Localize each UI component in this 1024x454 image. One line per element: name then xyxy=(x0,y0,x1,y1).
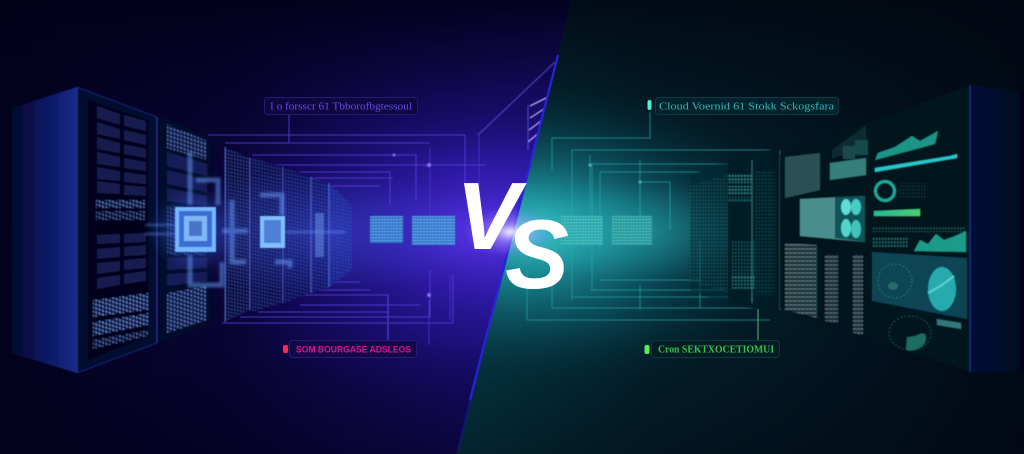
large glow: left chip xyxy=(147,188,243,272)
label: top right: Cloud Voernid 61 Stokk Sckogsfara xyxy=(659,102,834,112)
label: top left: I o forsscr 61 Tbborofbgtessoul xyxy=(270,102,412,112)
label: bottom left: SOM BOURGASE ADSLEOS xyxy=(296,344,411,356)
small tag xyxy=(937,319,961,329)
glowing circuit traces: left xyxy=(145,152,345,285)
circuit lines: left xyxy=(208,135,486,345)
small chip: left 1 xyxy=(370,216,403,243)
right background xyxy=(456,0,1024,454)
diagonal divider xyxy=(458,55,558,450)
chip: distant xyxy=(315,213,324,257)
callout connector: bottom left xyxy=(387,295,389,340)
chip: medium xyxy=(260,216,285,248)
center flare xyxy=(464,206,556,258)
callout connector: bottom right xyxy=(757,308,759,340)
noisy readout xyxy=(873,226,966,232)
area chart top xyxy=(875,131,938,160)
pie blob xyxy=(928,267,956,311)
horizontal light band: left xyxy=(150,170,490,294)
sliver of rack at seam xyxy=(478,62,555,150)
left background xyxy=(70,0,572,454)
VS letters xyxy=(456,163,569,309)
chart cards xyxy=(832,125,866,158)
dashboard side panel xyxy=(970,85,1024,372)
letter V: V xyxy=(456,163,527,270)
chip: large xyxy=(175,207,216,252)
distant display racks xyxy=(690,150,780,312)
horizontal light band: right xyxy=(520,182,760,282)
area chart bottom xyxy=(914,231,966,252)
text panel xyxy=(785,153,820,198)
distant racks xyxy=(225,147,352,322)
radar dial xyxy=(889,316,931,350)
label: bottom right xyxy=(644,340,780,358)
ring gauge xyxy=(876,182,894,200)
circuit lines: right xyxy=(527,112,770,320)
label: top right xyxy=(648,98,838,114)
rack 2 xyxy=(160,116,210,342)
teal analytics panel xyxy=(872,252,967,319)
label: bottom right: Cron SEKTXOCETIOMUI xyxy=(658,344,774,356)
progress bar green xyxy=(874,209,920,216)
callout connector: top left xyxy=(288,114,290,143)
label: top left xyxy=(264,98,418,114)
rack 1 with side panel xyxy=(10,87,157,373)
small chip: right 1 xyxy=(560,216,603,245)
letter S: S xyxy=(505,199,569,309)
data lists xyxy=(785,243,817,318)
small chip: right 2 xyxy=(612,216,652,245)
progress bar teal xyxy=(875,154,957,172)
server racks xyxy=(10,87,352,373)
data panel with glowing tiles xyxy=(800,196,865,242)
dashboard wall xyxy=(780,85,1024,372)
small chip: left 2 xyxy=(412,216,455,245)
label: bottom left xyxy=(283,340,416,358)
